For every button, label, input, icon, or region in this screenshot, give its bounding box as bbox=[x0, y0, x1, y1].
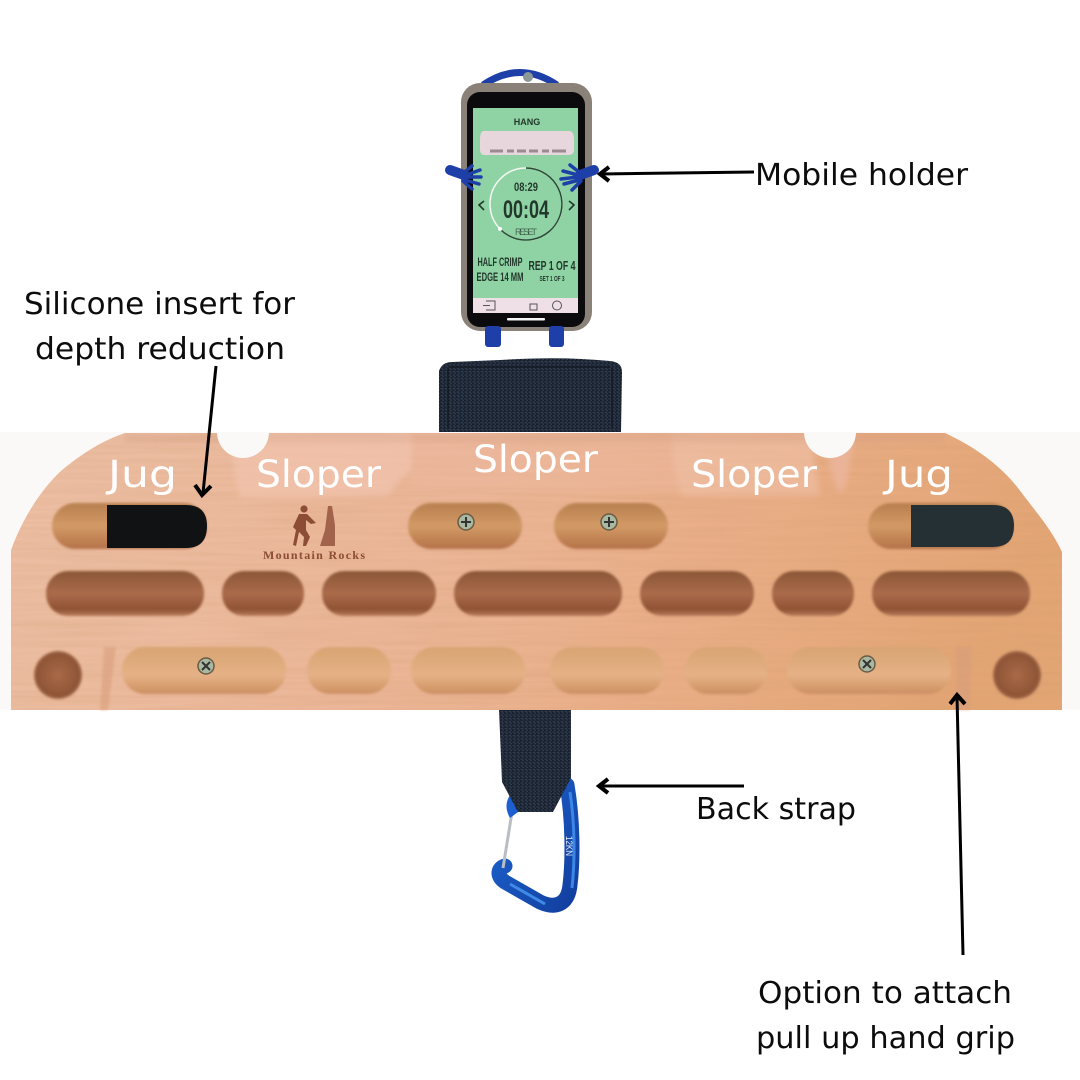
back strap top loop bbox=[439, 358, 622, 432]
mini board image bbox=[480, 131, 574, 155]
brand name: Mountain Rocks bbox=[263, 548, 365, 562]
pull-up grip slots bbox=[100, 646, 972, 710]
label: Sloper left: Sloper bbox=[256, 453, 382, 496]
app heading: HANG bbox=[514, 117, 540, 127]
remaining time: 08:29 bbox=[514, 180, 538, 194]
wooden hangboard bbox=[11, 433, 1062, 712]
top row holds bbox=[52, 503, 1014, 549]
label: pull up grip option: pull up hand grip bbox=[756, 1021, 1015, 1056]
carabiner rating text: 12KN bbox=[564, 836, 574, 856]
back strap lower webbing bbox=[499, 709, 571, 812]
holder feet bbox=[485, 326, 501, 347]
right silicone insert bbox=[911, 505, 1014, 547]
edge size: EDGE 14 MM bbox=[476, 270, 524, 284]
middle row holds bbox=[46, 571, 1030, 616]
grip name: HALF CRIMP bbox=[478, 255, 522, 269]
bottom row holds bbox=[122, 647, 951, 694]
sloper highlight zones bbox=[234, 434, 854, 496]
phone with holder bbox=[450, 72, 594, 347]
phone screen bezel bbox=[467, 92, 585, 327]
board screws bbox=[198, 514, 875, 674]
hang time: 00:04 bbox=[503, 196, 549, 224]
set count: SET 1 OF 3 bbox=[540, 276, 565, 283]
holder screw bbox=[523, 72, 533, 82]
off-white band behind board bbox=[0, 432, 1080, 710]
arrow: to mobile holder bbox=[600, 167, 754, 181]
label: Jug right: Jug bbox=[883, 453, 953, 496]
rep count: REP 1 OF 4 bbox=[528, 258, 576, 273]
arrow: to back strap bbox=[599, 779, 744, 793]
label: Jug left: Jug bbox=[106, 453, 177, 496]
label: Mobile holder: Mobile holder bbox=[755, 158, 969, 193]
brand logo bbox=[263, 505, 365, 562]
app toolbar icons bbox=[483, 301, 562, 310]
label: Sloper right: Sloper bbox=[691, 453, 818, 496]
label: Sloper centre: Sloper bbox=[473, 438, 599, 481]
holder right hand bbox=[561, 165, 594, 190]
app screen bbox=[473, 108, 578, 298]
holder top arc bbox=[483, 72, 557, 85]
arrow: to silicone insert bbox=[195, 366, 216, 495]
label: Back strap: Back strap bbox=[696, 792, 856, 827]
carabiner bbox=[499, 785, 574, 905]
notches bbox=[217, 433, 856, 458]
label: Silicone insert: Silicone insert for bbox=[24, 287, 296, 322]
label: pull up grip option bbox=[756, 976, 1015, 1056]
phone body bbox=[461, 83, 592, 331]
pocket holes bbox=[34, 651, 1041, 699]
left silicone insert bbox=[107, 505, 207, 548]
reset: RESET bbox=[515, 227, 538, 237]
timer ring bbox=[490, 168, 562, 240]
label: Silicone insert bbox=[24, 287, 296, 367]
holder left hand bbox=[450, 166, 481, 189]
label: pull up grip option: Option to attach bbox=[758, 976, 1012, 1011]
nav chevrons bbox=[479, 201, 574, 210]
label: Silicone insert: depth reduction bbox=[35, 332, 285, 367]
arrow: to pull up grip slot bbox=[950, 695, 965, 955]
home indicator bbox=[507, 318, 545, 320]
